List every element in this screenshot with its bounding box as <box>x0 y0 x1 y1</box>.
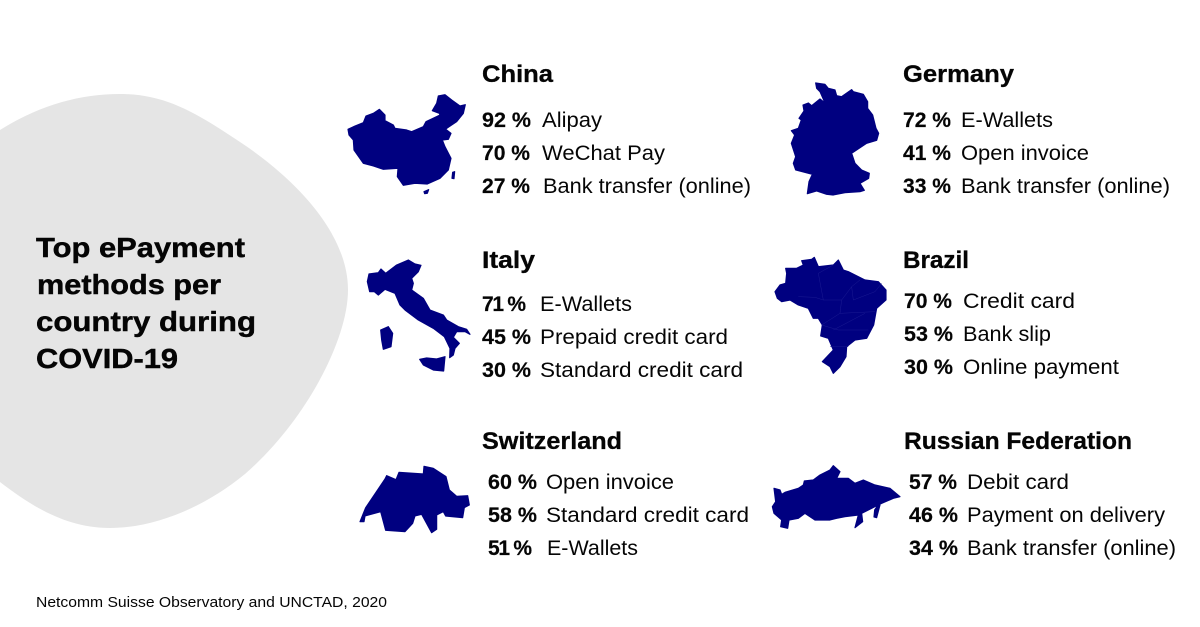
title: Top ePayment <box>36 232 245 263</box>
list: Switzerland methods <box>488 471 749 560</box>
icon: Brazil map <box>775 257 886 373</box>
list: Italy methods <box>482 293 743 382</box>
list: Brazil methods <box>904 290 1119 379</box>
list: China methods: 70 % <box>482 142 530 165</box>
icon: Germany map <box>791 83 879 195</box>
list: China methods: Alipay <box>542 109 603 132</box>
list: Brazil methods: Credit card <box>963 290 1075 313</box>
panel: Switzerland <box>360 428 749 560</box>
list: Switzerland methods: 51 % <box>488 537 532 560</box>
icon: China map <box>348 95 465 194</box>
list: Russia methods: Bank transfer (online) <box>967 537 1176 560</box>
list: Italy methods: E-Wallets <box>540 293 632 316</box>
list: Russia methods: Debit card <box>967 471 1069 494</box>
list: Russia methods: Payment on delivery <box>967 504 1166 527</box>
background blob <box>0 94 348 528</box>
list: Italy methods: 71 % <box>482 293 526 316</box>
heading: Germany: Germany <box>903 61 1015 88</box>
heading: Italy: Italy <box>482 247 536 274</box>
list: China methods: WeChat Pay <box>542 142 666 165</box>
list: Italy methods: Standard credit card <box>540 359 743 382</box>
list: Switzerland methods: 58 % <box>488 504 537 527</box>
list: China methods: 27 % <box>482 175 530 198</box>
list: Germany methods: Bank transfer (online) <box>961 175 1170 198</box>
list: Germany methods: Open invoice <box>961 142 1089 165</box>
panel: Germany <box>791 61 1170 198</box>
icon: Russia map <box>772 466 900 528</box>
list: Germany methods: 41 % <box>903 142 951 165</box>
list: Italy methods: 45 % <box>482 326 531 349</box>
heading: Switzerland: Switzerland <box>482 428 622 455</box>
panel: Russian Federation <box>772 428 1176 560</box>
list: Brazil methods: 53 % <box>904 323 953 346</box>
icon: Italy map <box>367 260 470 371</box>
list: Switzerland methods: Standard credit card <box>546 504 749 527</box>
icon: Switzerland map <box>360 466 469 533</box>
title <box>36 232 256 374</box>
list: China methods: Bank transfer (online) <box>543 175 751 198</box>
heading: Russian Federation: Russian Federation <box>904 428 1132 455</box>
list: Brazil methods: Online payment <box>963 356 1119 379</box>
list: China methods <box>482 109 751 198</box>
list: Switzerland methods: 60 % <box>488 471 537 494</box>
panel: Italy <box>367 247 743 382</box>
list: Italy methods: Prepaid credit card <box>540 326 728 349</box>
list: Russia methods: 57 % <box>909 471 957 494</box>
title: methods per <box>37 269 221 300</box>
list: China methods: 92 % <box>482 109 531 132</box>
list: Germany methods: 72 % <box>903 109 951 132</box>
list: Russia methods: 46 % <box>909 504 958 527</box>
heading: Brazil: Brazil <box>903 247 969 274</box>
list: Russia methods <box>909 471 1176 560</box>
panel: Brazil <box>775 247 1119 379</box>
panel: China <box>348 61 751 198</box>
list: Switzerland methods: Open invoice <box>546 471 674 494</box>
title: country during <box>36 306 256 337</box>
list: Brazil methods: Bank slip <box>963 323 1051 346</box>
list: Germany methods: E-Wallets <box>961 109 1053 132</box>
list: Italy methods: 30 % <box>482 359 531 382</box>
title: COVID-19 <box>36 343 178 374</box>
list: Brazil methods: 30 % <box>904 356 953 379</box>
heading: China: China <box>482 61 554 88</box>
source note: Netcomm Suisse Observatory and UNCTAD, 2020 <box>36 594 387 611</box>
list: Russia methods: 34 % <box>909 537 958 560</box>
list: Brazil methods: 70 % <box>904 290 952 313</box>
list: Germany methods <box>903 109 1170 198</box>
list: Switzerland methods: E-Wallets <box>547 537 638 560</box>
list: Germany methods: 33 % <box>903 175 951 198</box>
